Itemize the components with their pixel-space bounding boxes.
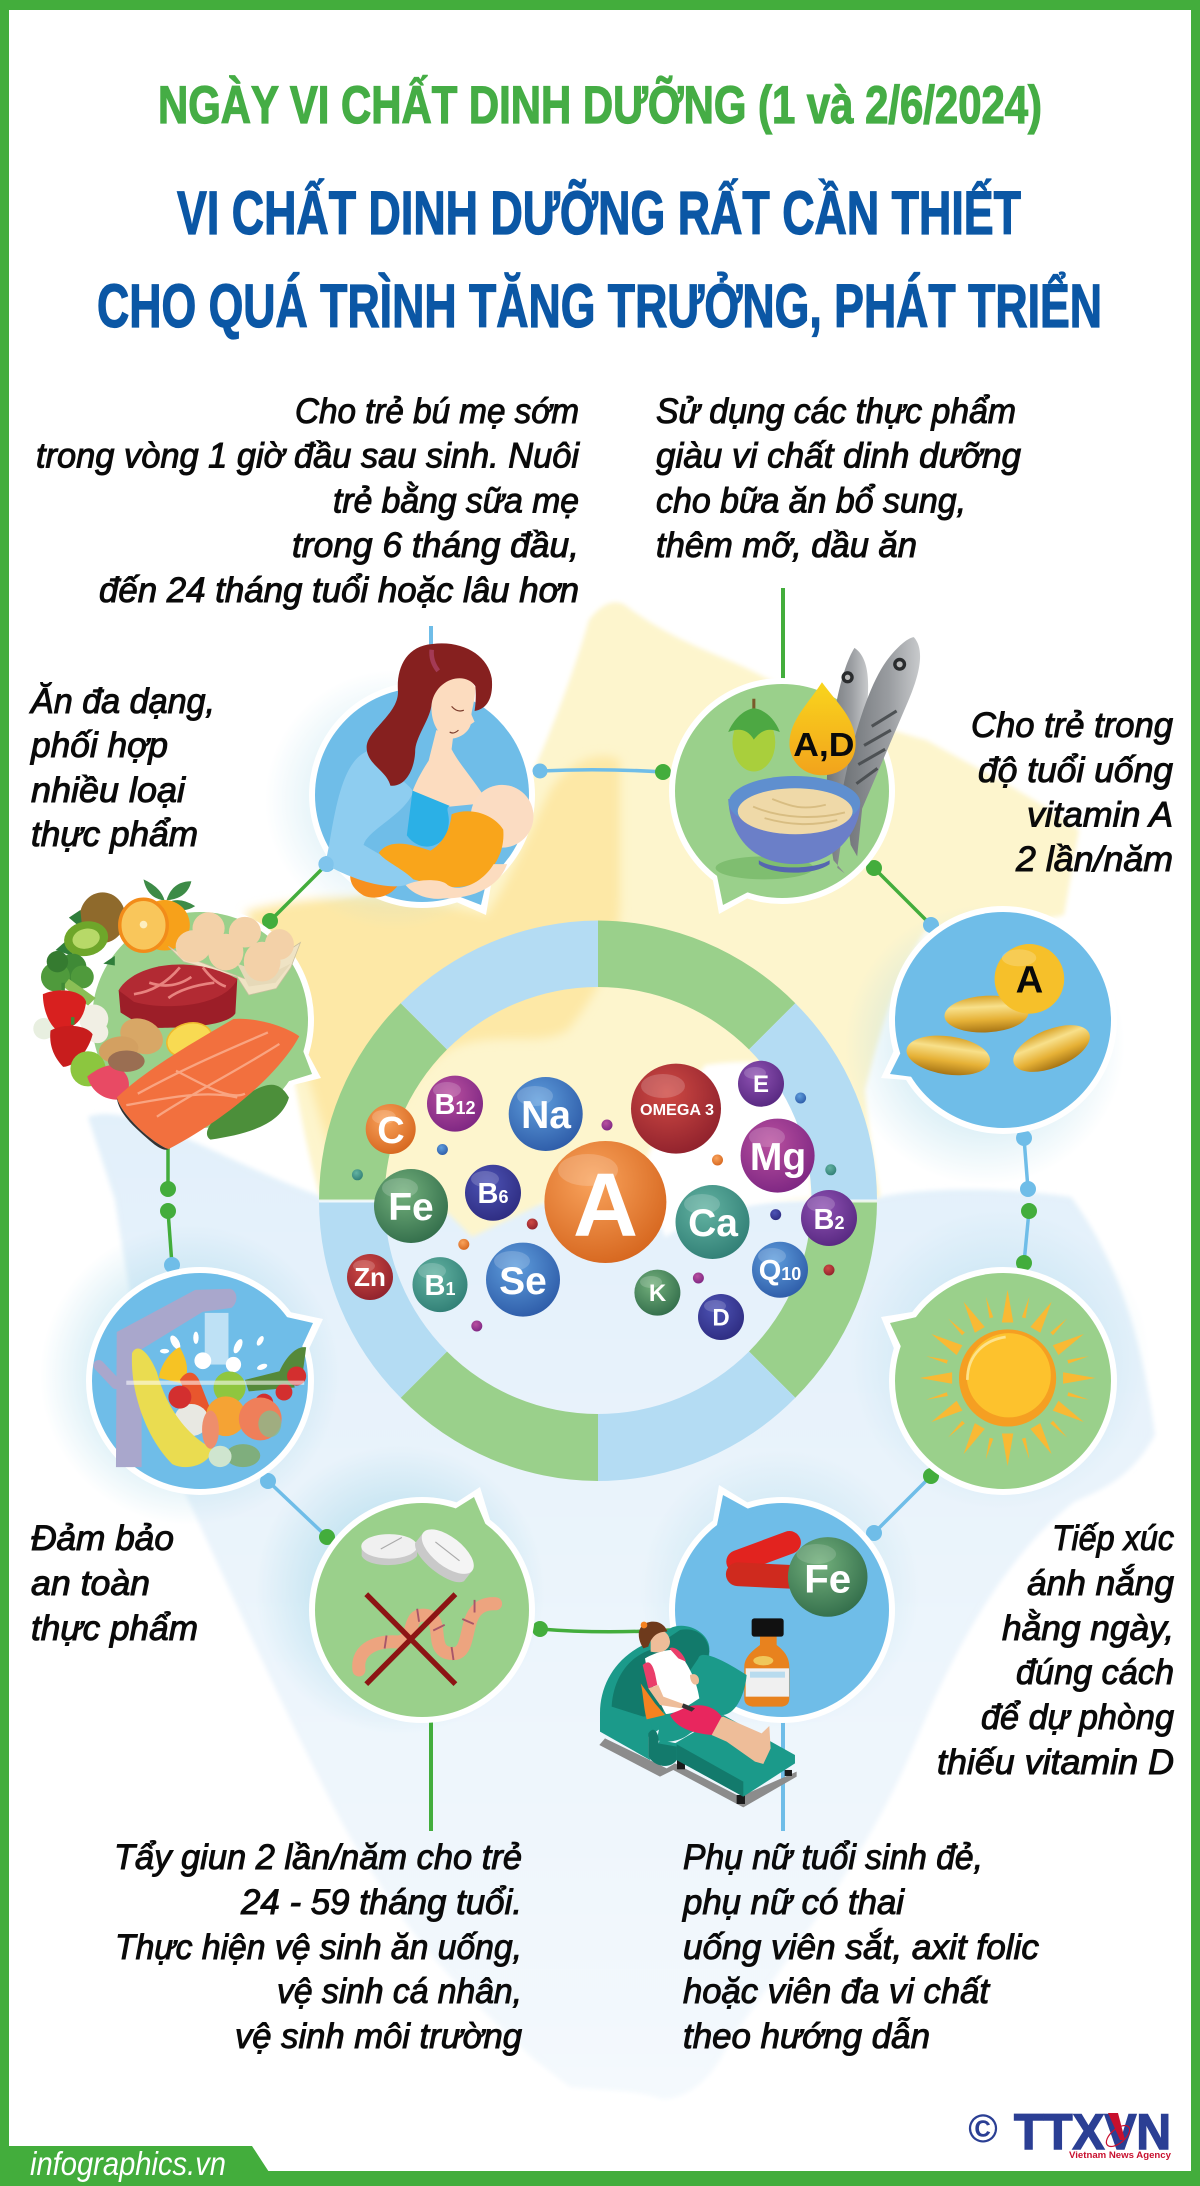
background blob: deeper yellow (245, 756, 620, 1150)
text: women iron: phụ nữ có thai (682, 1883, 905, 1922)
logo: TTXVN: TTXVN (1014, 2104, 1171, 2160)
bubble: B2 (801, 1190, 857, 1246)
bubble: Zn: Zn (354, 1262, 386, 1292)
panel: food circle (86, 906, 321, 1134)
text: varied diet: Ăn đa dạng, (29, 682, 215, 721)
bubble: B6: B6 (478, 1178, 508, 1210)
connector: mother to food bowl (532, 764, 671, 780)
panel: capsule circle (881, 906, 1117, 1134)
text: deworming: Thực hiện vệ sinh ăn uống, (115, 1928, 522, 1967)
text: vitamin A: Cho trẻ trong (971, 706, 1174, 745)
text: sunlight: ánh nắng (1027, 1564, 1175, 1603)
text: women iron: theo hướng dẫn (683, 2017, 930, 2056)
bubble: B1 (412, 1257, 468, 1312)
small dots (352, 1092, 836, 1332)
bubble: E: E (753, 1071, 769, 1098)
bubble: B12 (427, 1076, 483, 1132)
bubble: B12: B12 (435, 1089, 475, 1121)
text: food safety: Đảm bảo (31, 1519, 174, 1558)
background blob: light yellow (268, 602, 1079, 1237)
text: breastfeeding: Cho trẻ bú mẹ sớm (295, 392, 579, 431)
connector: food bowl top line (781, 588, 785, 680)
text: sunlight: Tiếp xúc (1052, 1519, 1174, 1558)
panel: wash circle (86, 1267, 323, 1495)
text: women iron: hoặc viên đa vi chất (683, 1972, 990, 2011)
text: deworming: 24 - 59 tháng tuổi. (240, 1883, 522, 1922)
bubble: Se: Se (499, 1260, 547, 1303)
text: deworming: vệ sinh cá nhân, (277, 1972, 522, 2011)
bubble: Se (486, 1243, 560, 1317)
text: vitamin A: 2 lần/năm (1015, 840, 1173, 879)
connector: sun to iron (866, 1468, 939, 1541)
icon: iron pills and bubble (738, 1537, 868, 1617)
text: vitamin A (971, 706, 1174, 879)
text: varied diet: phối hợp (30, 726, 168, 765)
connector: food to mother (262, 856, 335, 929)
icon: food bowl, oil drop, fish (716, 637, 920, 879)
bubble: Q10 (752, 1242, 808, 1298)
text: varied diet: thực phẩm (31, 815, 198, 854)
text: complementary food: thêm mỡ, dầu ăn (656, 526, 917, 565)
connector: capsule to sun (1016, 1130, 1037, 1271)
text: women iron: uống viên sắt, axit folic (683, 1928, 1039, 1967)
bubble: Omega 3 (631, 1064, 721, 1154)
bubble: Mg: Mg (750, 1136, 806, 1179)
connector: worm bottom line (429, 1720, 433, 1831)
bubble: Fe (374, 1169, 448, 1243)
bubble: Ca (676, 1185, 750, 1259)
connector: mother top line (429, 626, 433, 660)
footer site name: infographics.vn (30, 2145, 226, 2182)
bubble: A (544, 1141, 666, 1263)
icon: pills and crossed-out worms (359, 1521, 496, 1684)
text: women iron: Phụ nữ tuổi sinh đẻ, (683, 1838, 983, 1877)
connector: wash to food (160, 1140, 180, 1273)
icon: washing food under tap (99, 1289, 306, 1467)
bubble: A: A (573, 1156, 638, 1256)
soft glow: circles (40, 670, 1150, 1735)
logo: TTXVN: © (968, 2107, 998, 2151)
connector: worm to wash (260, 1473, 335, 1545)
panel: bowl circle (669, 678, 895, 914)
bubble: D: D (712, 1304, 730, 1332)
text: complementary food: giàu vi chất dinh dưỡng (656, 436, 1022, 476)
text: breastfeeding: trong 6 tháng đầu, (292, 526, 579, 565)
icon: vitamin capsules: A (1016, 958, 1043, 1001)
text: breastfeeding: đến 24 tháng tuổi hoặc lâu hơn (99, 571, 579, 610)
connector: iron bottom line (781, 1720, 785, 1831)
icon: sun (920, 1290, 1096, 1466)
text: women iron (682, 1838, 1039, 2056)
panel: mother circle (309, 682, 535, 915)
bubble: Omega 3: OMEGA 3 (640, 1102, 714, 1119)
bubble: Ca: Ca (688, 1202, 738, 1245)
text: deworming: vệ sinh môi trường (235, 2017, 523, 2056)
nutrient ring (319, 920, 877, 1481)
text: food safety (31, 1519, 198, 1648)
bubble: Fe: Fe (388, 1186, 434, 1229)
text: varied diet: nhiều loại (31, 771, 186, 810)
text: food safety: thực phẩm (31, 1609, 198, 1648)
bubble: C (366, 1104, 416, 1154)
logo: TTXVN: Vietnam News Agency (1069, 2150, 1171, 2160)
background blob: light blue (88, 1114, 1155, 2099)
bubble: K: K (649, 1280, 667, 1307)
panel: iron circle (669, 1485, 895, 1723)
panel: sun circle (881, 1267, 1117, 1495)
footer tab (9, 2146, 269, 2172)
icon: iron pills and bubble: Fe (804, 1557, 851, 1602)
bubble: Q10: Q10 (759, 1255, 801, 1287)
bubble: D (698, 1294, 744, 1340)
bubble: B2: B2 (814, 1204, 844, 1236)
background patch: white behind minerals (646, 1062, 812, 1237)
bubble: B6 (465, 1165, 521, 1221)
icon: food bowl, oil drop, fish: A,D (793, 727, 854, 764)
text: sunlight: đúng cách (1016, 1653, 1174, 1692)
text: sunlight: thiếu vitamin D (937, 1743, 1174, 1782)
text: complementary food: Sử dụng các thực phẩm (656, 392, 1016, 431)
bubble: Mg (741, 1119, 815, 1193)
text: vitamin A: vitamin A (1027, 796, 1173, 834)
text: sunlight (937, 1519, 1175, 1782)
text: varied diet (29, 682, 215, 854)
text: deworming: Tẩy giun 2 lần/năm cho trẻ (114, 1838, 522, 1877)
icon: pregnant woman on chaise (599, 1622, 797, 1807)
bubble: B1: B1 (425, 1270, 455, 1302)
text: breastfeeding: trong vòng 1 giờ đầu sau sinh. Nuôi (36, 436, 580, 476)
icon: supplement bottle (744, 1618, 789, 1707)
text: sunlight: để dự phòng (981, 1698, 1175, 1737)
connector: bowl to capsule (866, 860, 939, 933)
bubble: Na: Na (521, 1094, 571, 1137)
icon: mother and baby (318, 643, 533, 899)
text: complementary food (656, 392, 1022, 565)
panel: worm circle (309, 1487, 535, 1723)
text: sunlight: hằng ngày, (1002, 1609, 1174, 1648)
text: complementary food: cho bữa ăn bổ sung, (656, 482, 966, 520)
bubble: Na (509, 1077, 583, 1151)
text: food safety: an toàn (31, 1564, 150, 1603)
text: vitamin A: độ tuổi uống (978, 751, 1174, 790)
bubble: E (738, 1061, 784, 1107)
text: deworming (114, 1838, 523, 2056)
bubble: K (634, 1270, 680, 1316)
bubble: C: C (377, 1110, 405, 1152)
bubble: Zn (347, 1254, 393, 1300)
icon: vitamin capsules (904, 944, 1096, 1081)
connector: worm to iron (532, 1621, 670, 1637)
text: breastfeeding (36, 392, 580, 610)
icon: food assortment (33, 879, 300, 1150)
text: breastfeeding: trẻ bằng sữa mẹ (333, 482, 579, 520)
